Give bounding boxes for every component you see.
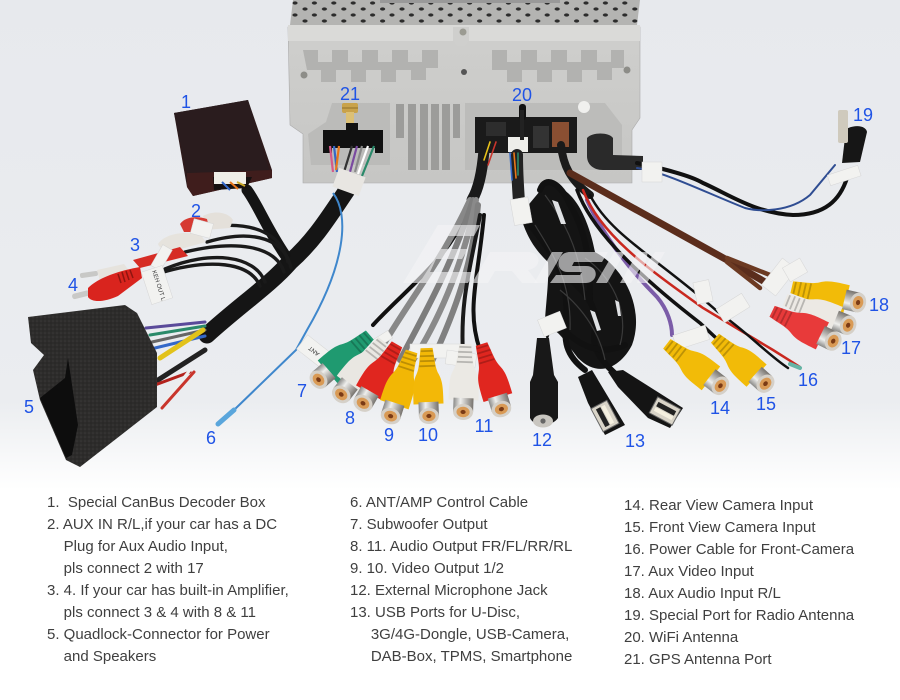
connector 7 subwoofer RCA	[303, 324, 380, 396]
13 USB port left	[578, 370, 625, 435]
connector 11 RCA white	[448, 344, 480, 421]
legend column 3: 14. Rear View Camera Input 15. Front View Camera Input 16. Power Cable for Front-Camera 17. Aux Video Input 18. Aux Audio Input R/L 19. Special Port for Radio Antenna 20. WiFi Antenna 21. GPS Antenna Port	[624, 497, 854, 668]
number labels: 2	[191, 201, 201, 221]
icon: GPS antenna port	[342, 103, 358, 124]
number labels: 3	[130, 235, 140, 255]
audio aux cables	[160, 225, 291, 286]
number labels: 4	[68, 275, 78, 295]
connector 8 RCA white	[324, 332, 395, 410]
5 quadlock connector foam	[28, 305, 157, 467]
13 USB port right	[608, 370, 683, 428]
number labels: 19	[853, 105, 873, 125]
number labels: 16	[798, 370, 818, 390]
12 microphone jack	[530, 338, 558, 428]
connector 15 RCA yellow	[705, 327, 781, 400]
number labels: 20	[512, 85, 532, 105]
legend column 2: 6. ANT/AMP Control Cable 7. Subwoofer Output 8. 11. Audio Output FR/FL/RR/RL 9. 10. Video Output 1/2 12. External Microphone Jack 13. USB Ports for U-Disc, 3G/4G-Dongle, USB-Camera, DAB-Box, TPMS, Smartphone	[350, 494, 572, 665]
number labels: 7	[297, 381, 307, 401]
quadlock wires	[146, 322, 205, 408]
connectors 2 and 3 and 4: male RCA plugs: KEH OUT L	[150, 270, 166, 302]
watermark	[403, 225, 665, 283]
number labels: 5	[24, 397, 34, 417]
castellated ribs	[303, 50, 624, 82]
number labels: 10	[418, 425, 438, 445]
rear panel	[288, 27, 640, 183]
main harness sleeve	[207, 190, 347, 335]
black coiled microphone and USB cables	[520, 182, 636, 378]
head unit chassis	[288, 0, 643, 183]
icon: centre connector block	[475, 104, 577, 153]
connector 11 RCA red	[467, 340, 518, 421]
icon: left harness connector	[323, 123, 383, 176]
wire labels	[297, 162, 861, 369]
decoder box cables	[160, 190, 347, 335]
legend column 1: 1. Special CanBus Decoder Box 2. AUX IN R/L,if your car has a DC Plug for Aux Audio Input, pls connect 2 with 17 3. 4. If your car has built-in Amplifier, pls connect 3 & 4 with 8 & 11 5. Quadlock-Connector for Power and Speakers	[47, 494, 289, 665]
harness band near connector	[332, 168, 366, 196]
perforated top cover	[290, 0, 640, 25]
6 blue control wire	[218, 193, 342, 424]
connector 10 RCA yellow	[412, 348, 444, 425]
icon: radio antenna elbow	[587, 134, 643, 170]
number labels: 6	[206, 428, 216, 448]
number labels: 9	[384, 425, 394, 445]
number labels: 1	[181, 92, 191, 112]
number labels: 8	[345, 408, 355, 428]
number labels: 11	[475, 416, 493, 436]
number labels: 15	[756, 394, 776, 414]
centre cable bundle	[373, 142, 520, 366]
right side wires	[561, 145, 847, 368]
number labels: 13	[625, 431, 645, 451]
number labels: 17	[841, 338, 861, 358]
connector 18 RCA white	[779, 286, 861, 342]
number labels	[24, 84, 889, 451]
connectors 2 and 3 and 4: male RCA plugs	[72, 213, 233, 305]
1 decoder box	[174, 100, 272, 196]
connector 18 RCA yellow	[788, 273, 869, 319]
connector 9 RCA yellow	[374, 347, 426, 428]
19 radio antenna plug	[838, 110, 867, 163]
number labels: 18	[869, 295, 889, 315]
connector 8 RCA red	[346, 337, 410, 418]
number labels: 14	[710, 398, 730, 418]
wire labels: ANT	[308, 344, 321, 356]
number labels: 12	[532, 430, 552, 450]
connector 14 RCA yellow	[658, 332, 736, 403]
vent slots	[396, 104, 460, 170]
number labels: 21	[340, 84, 360, 104]
connector 17 RCA red	[766, 298, 847, 358]
